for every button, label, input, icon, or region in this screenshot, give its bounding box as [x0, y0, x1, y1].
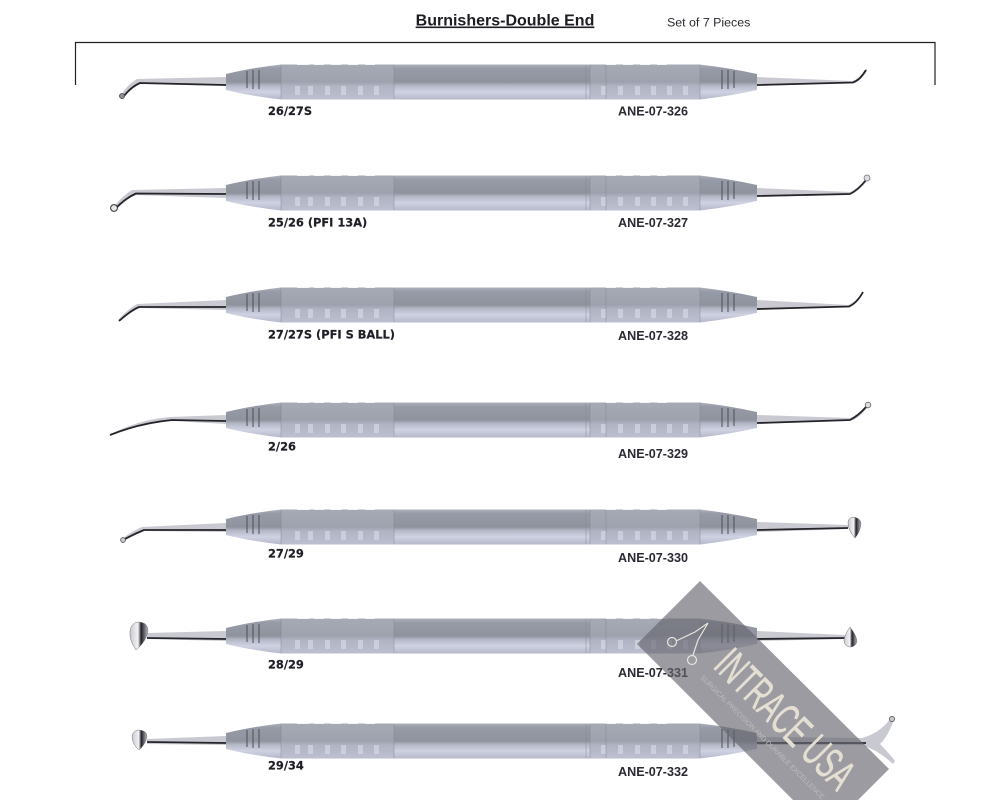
- bracket frame: [76, 42, 935, 85]
- label: code: ANE-07-326: [618, 104, 688, 118]
- instrument 2: 25/26 (PFI 13A): [111, 175, 870, 230]
- instrument 5: 27/29: [121, 509, 861, 565]
- instrument 6: 28/29: [130, 618, 857, 680]
- label: model: 27/27S (PFI S BALL): [268, 328, 395, 342]
- label: code: ANE-07-332: [618, 765, 688, 779]
- subtitle: set size: Set of 7 Pieces: [667, 16, 750, 30]
- label: model: 26/27S: [268, 104, 312, 118]
- label: model: 29/34: [268, 758, 304, 772]
- instrument 1: 26/27S: [119, 64, 867, 118]
- label: code: ANE-07-331: [618, 666, 688, 680]
- label: code: ANE-07-330: [618, 551, 688, 565]
- label: model: 28/29: [268, 658, 304, 672]
- instrument 7: 29/34: [132, 716, 895, 779]
- label: code: ANE-07-329: [618, 447, 688, 461]
- label: model: 25/26 (PFI 13A): [268, 216, 367, 230]
- label: model: 2/26: [268, 440, 296, 454]
- label: code: ANE-07-327: [618, 216, 688, 230]
- instrument 3: 27/27S (PFI S BALL): [118, 287, 863, 343]
- label: model: 27/29: [268, 546, 304, 560]
- label: code: ANE-07-328: [618, 329, 688, 343]
- icon: surgical scissors: [668, 623, 708, 664]
- instrument 4: 2/26: [108, 402, 871, 461]
- watermark: INTRACE USA: [637, 581, 889, 800]
- watermark tagline: SURGICAL PRECISION AND DURABLE EXCELLENCE: [699, 674, 825, 800]
- title: Burnishers-Double End: [416, 12, 594, 30]
